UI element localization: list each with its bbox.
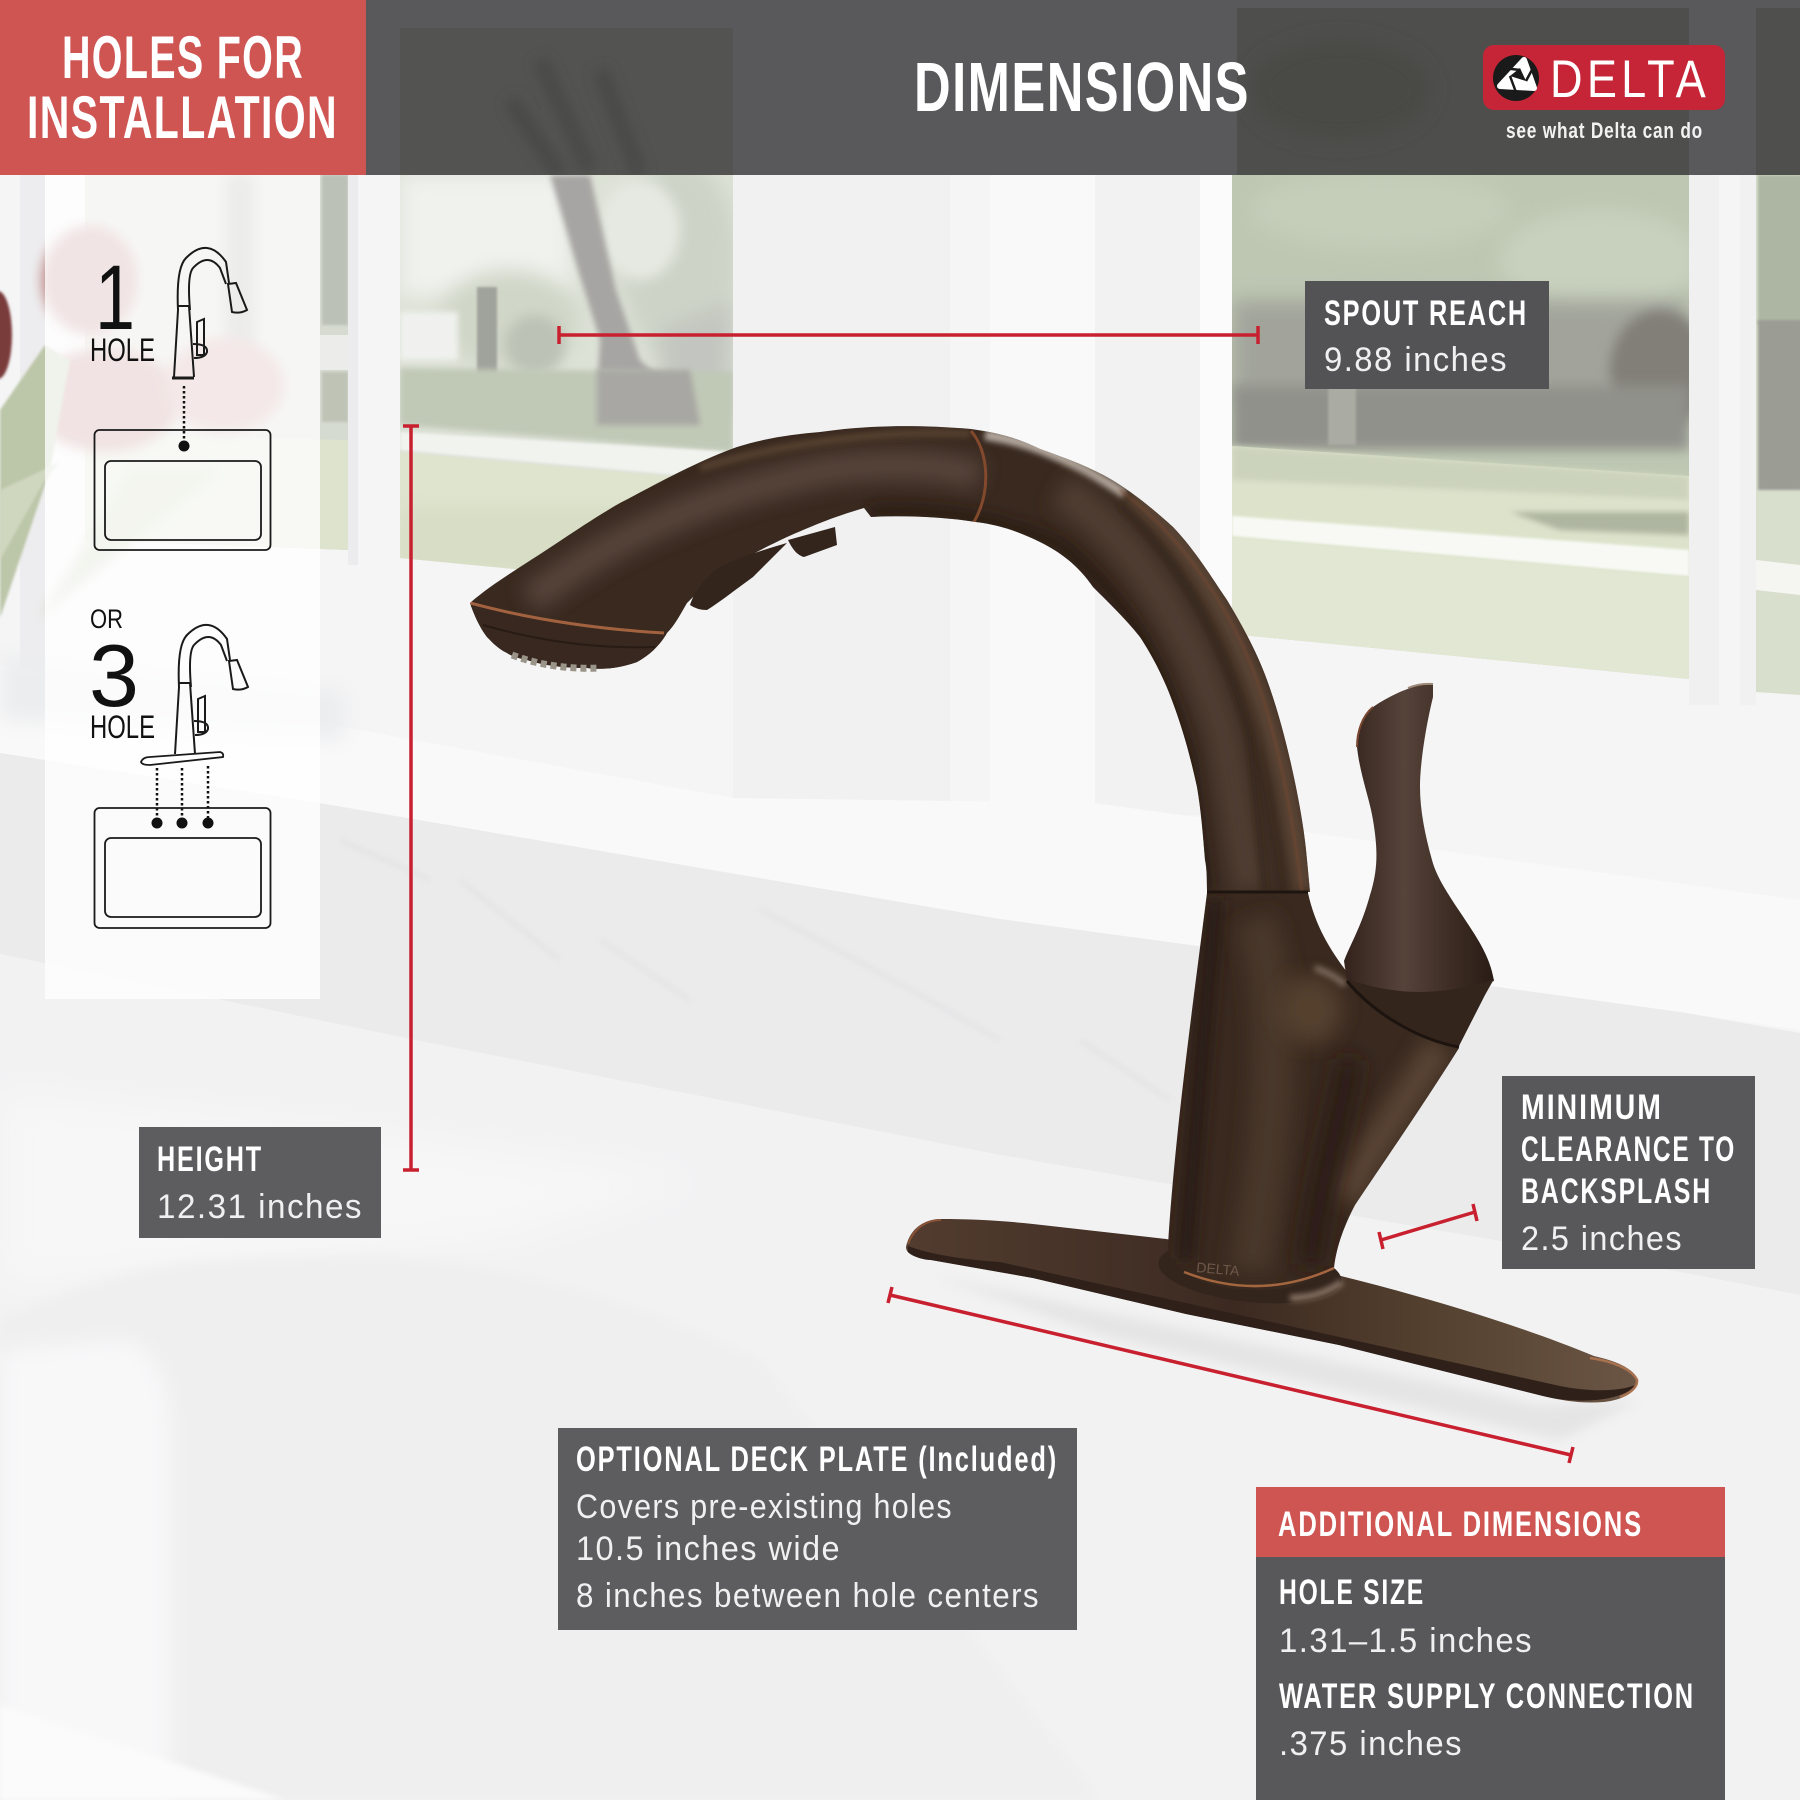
header band — [366, 0, 1800, 175]
callout: height: 12.31 inches — [157, 1188, 363, 1226]
three hole option: 3 — [89, 626, 139, 725]
icon: sink with three holes — [94, 808, 270, 928]
callout: minimum clearance: 2.5 inches — [1521, 1220, 1683, 1258]
three hole option: OR — [90, 604, 123, 634]
window pane: centre left with tree — [400, 175, 733, 570]
icon: faucet outline — [172, 248, 247, 378]
panel heading: INSTALLATION — [27, 84, 338, 151]
spray aerator — [512, 655, 600, 668]
callout: optional deck plate: 10.5 inches wide — [576, 1530, 841, 1568]
window pane: centre right with trees — [1232, 175, 1689, 679]
callout: optional deck plate — [558, 1428, 1077, 1630]
panel heading — [0, 0, 366, 175]
deck plate — [906, 1219, 1638, 1403]
window sill — [0, 665, 1800, 1030]
window pane: left behind panel — [85, 28, 348, 550]
callout: spout reach: SPOUT REACH — [1324, 294, 1528, 333]
faucet photograph — [460, 420, 1638, 1403]
callout: minimum clearance — [1502, 1076, 1755, 1269]
one hole option: 1 — [95, 247, 135, 349]
header tree texture — [400, 8, 1800, 175]
window frame shading — [20, 175, 1756, 815]
delta logo: see what Delta can do — [1506, 118, 1703, 143]
countertop — [0, 954, 1800, 1800]
panel backdrop — [45, 175, 320, 999]
callout: spout reach — [1305, 281, 1549, 389]
callout: minimum clearance: MINIMUM — [1521, 1088, 1663, 1127]
icon: sink with one hole — [94, 430, 270, 550]
title: dimensions: DIMENSIONS — [914, 48, 1250, 126]
handle — [1344, 683, 1494, 1047]
callout: height: HEIGHT — [157, 1140, 263, 1179]
dimension line: clearance — [1379, 1204, 1477, 1249]
callout: spout reach: 9.88 inches — [1324, 341, 1508, 379]
callout: height — [139, 1127, 381, 1238]
marble backsplash — [0, 753, 1800, 1295]
additional dimensions heading — [1256, 1487, 1725, 1557]
spray head rim — [470, 604, 667, 669]
window pane: far right — [1756, 8, 1800, 695]
faucet shadow on counter — [930, 1275, 1640, 1440]
callout: optional deck plate: OPTIONAL DECK PLATE (Included) — [576, 1440, 1058, 1479]
callout: additional dimensions: 1.31–1.5 inches — [1279, 1622, 1533, 1660]
background scene: window, sill and counter — [0, 175, 1800, 1440]
three hole option: HOLE — [90, 709, 155, 745]
panel heading: HOLES FOR — [62, 24, 304, 91]
callout: optional deck plate: 8 inches between hole centers — [576, 1577, 1040, 1615]
panel: holes for installation — [0, 0, 366, 999]
delta logo: DELTA — [1550, 50, 1710, 109]
tulip flowers — [0, 225, 285, 620]
spout tube — [460, 420, 1320, 900]
sink basin — [0, 1257, 1100, 1800]
dimension line: spout reach — [559, 326, 1258, 344]
callout: additional dimensions: .375 inches — [1279, 1725, 1463, 1763]
callout: additional dimensions: HOLE SIZE — [1279, 1573, 1425, 1612]
faucet body — [1160, 885, 1470, 1295]
one hole option: HOLE — [90, 332, 155, 368]
callout: minimum clearance: BACKSPLASH — [1521, 1172, 1712, 1211]
spray buttons — [690, 527, 837, 610]
dimension line: height — [403, 426, 419, 1170]
three hole option — [89, 604, 270, 928]
callout: additional dimensions — [1256, 1487, 1725, 1800]
icon: faucet with deck plate — [175, 625, 248, 754]
one hole option — [90, 247, 270, 550]
additional dimensions heading: ADDITIONAL DIMENSIONS — [1278, 1505, 1643, 1544]
callout: optional deck plate: Covers pre-existing holes — [576, 1488, 953, 1526]
dimension line: deck plate width — [888, 1287, 1573, 1463]
etched brand mark: DELTA — [1196, 1259, 1241, 1279]
delta logo — [1483, 45, 1725, 143]
